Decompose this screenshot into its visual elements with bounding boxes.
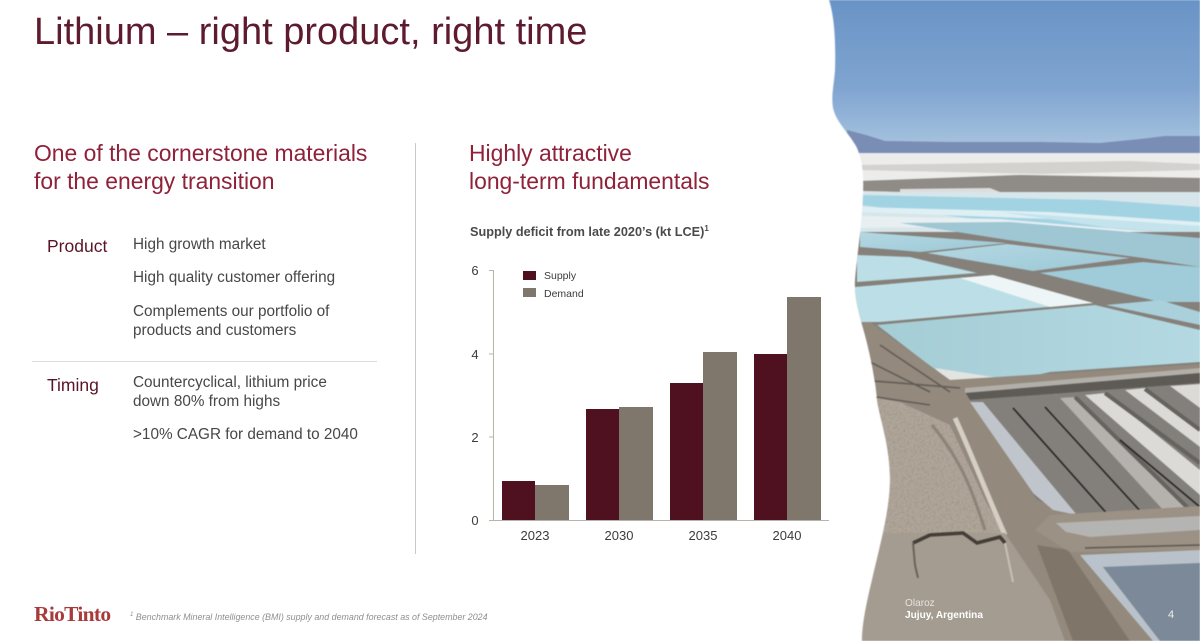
page number: 4 — [1168, 609, 1174, 621]
row divider — [32, 361, 377, 362]
heading: left column — [34, 140, 367, 194]
photo caption: Jujuy, Argentina — [905, 610, 983, 621]
mountains — [847, 130, 1200, 154]
label: timing: Timing — [47, 375, 99, 395]
heading: left column: for the energy transition — [34, 168, 274, 194]
text block: timing points: Countercyclical, lithium price — [133, 374, 327, 391]
cross road — [1056, 506, 1200, 551]
gridded pond — [1080, 550, 1200, 641]
axes — [489, 270, 829, 520]
text block: product points: Complements our portfolio of — [133, 303, 329, 320]
label: product: Product — [47, 236, 107, 256]
y axis labels: 2 — [471, 430, 479, 445]
vertical divider — [415, 143, 416, 554]
x axis labels: 2040 — [773, 528, 801, 543]
text block: timing points — [133, 374, 358, 443]
text block: product points: High quality customer offering — [133, 269, 335, 286]
desert ground upper — [877, 398, 1008, 535]
road network — [850, 322, 1200, 641]
desert ground lower — [860, 533, 1065, 641]
text block: timing points: >10% CAGR for demand to 2040 — [133, 426, 358, 443]
text block: product points — [133, 236, 335, 339]
footnote: 1 Benchmark Mineral Intelligence (BMI) supply and demand forecast as of September 2024 — [130, 612, 488, 622]
legend: Demand — [544, 288, 584, 300]
x axis labels: 2023 — [521, 528, 549, 543]
legend — [523, 270, 584, 300]
heading: right column: Highly attractive — [469, 140, 632, 166]
y axis labels: 6 — [471, 263, 479, 278]
heading: right column: long-term fundamentals — [469, 168, 709, 194]
x axis labels — [521, 528, 801, 543]
salt flats — [858, 152, 1200, 193]
text block: timing points: down 80% from highs — [133, 393, 280, 410]
bars: 2030 — [586, 407, 653, 520]
main diagonal road — [1037, 545, 1130, 641]
text block: product points: products and customers — [133, 322, 296, 339]
bars: 2040 — [754, 297, 821, 520]
sky — [820, 0, 1200, 144]
logo: Rio Tinto: RioTinto — [34, 602, 110, 626]
striped salt harvest field — [970, 383, 1200, 517]
y axis labels — [471, 263, 479, 528]
heading: left column: One of the cornerstone materials — [34, 140, 367, 166]
bars: 2035 — [670, 352, 737, 520]
chart title: Supply deficit from late 2020’s (kt LCE)1 — [470, 224, 709, 239]
x axis labels: 2035 — [689, 528, 717, 543]
title: Lithium – right product, right time — [34, 11, 587, 53]
y axis labels: 4 — [471, 347, 479, 362]
bars: 2023 — [502, 481, 569, 520]
photo caption — [905, 598, 984, 621]
x axis labels: 2030 — [605, 528, 633, 543]
text block: product points: High growth market — [133, 236, 266, 253]
heading: right column — [469, 140, 709, 194]
legend: Supply — [544, 270, 577, 282]
evaporation ponds — [850, 192, 1200, 382]
photo: lithium brine ponds at Olaroz — [828, 0, 1200, 641]
y axis labels: 0 — [471, 513, 479, 528]
dune ridge — [913, 533, 1013, 582]
photo caption: Olaroz — [905, 598, 935, 609]
